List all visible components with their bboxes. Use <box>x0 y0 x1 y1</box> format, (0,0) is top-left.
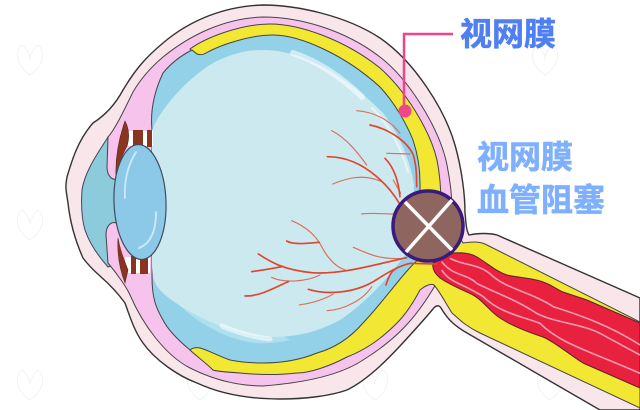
lens <box>112 144 168 260</box>
watermarks <box>17 45 563 400</box>
blocked vessel circle with X <box>393 191 463 261</box>
cornea chamber <box>82 137 130 267</box>
label: retinal vascular occlusion: 视网膜 <box>477 139 573 175</box>
choroid pink layer <box>106 17 452 386</box>
optic nerve red core <box>433 253 640 388</box>
ciliary stripes upper <box>128 130 153 147</box>
lower lighter blue band <box>153 270 290 343</box>
vitreous light body <box>152 50 414 337</box>
iris upper <box>116 121 129 178</box>
pointer line to retina <box>398 34 453 118</box>
nerve fibres <box>442 258 640 373</box>
vitreous outer blue <box>152 35 420 363</box>
label: retina: 视网膜 <box>460 16 556 52</box>
label: retinal vascular occlusion: 血管阻塞 <box>477 182 605 218</box>
ciliary stripes lower <box>125 256 150 274</box>
retinal blood vessels <box>245 111 437 311</box>
iris lower <box>118 238 128 283</box>
yellow layer with nerve sheath <box>190 24 640 408</box>
vitreous highlights <box>222 53 408 339</box>
label: retinal vascular occlusion <box>477 139 605 218</box>
